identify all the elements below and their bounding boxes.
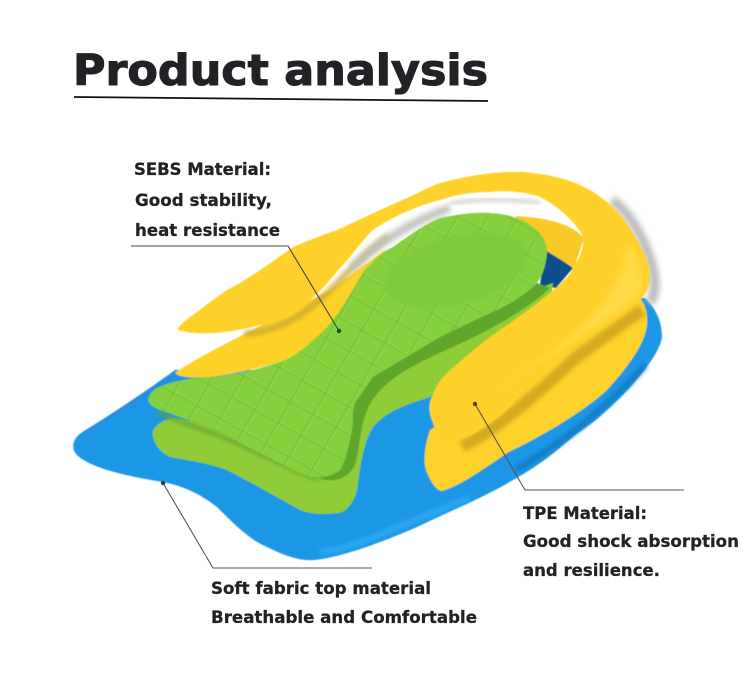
title: Product analysis — [73, 46, 488, 96]
dark green step — [318, 283, 550, 480]
callout: soft fabric: Breathable and Comfortable — [211, 608, 477, 627]
callout: SEBS material: SEBS Material: — [134, 160, 271, 179]
callout: SEBS material — [131, 160, 341, 333]
callout: soft fabric — [161, 481, 477, 627]
heel cup — [378, 221, 534, 319]
callout: TPE material — [473, 402, 739, 580]
dark gap behind heel — [540, 248, 573, 288]
upper yellow U piece — [178, 172, 650, 443]
shadow along U inner edge — [244, 236, 388, 334]
insole illustration — [73, 172, 662, 560]
lower yellow TPE layer — [425, 298, 647, 491]
callout: TPE material: TPE Material: — [523, 504, 647, 523]
callout: SEBS material: Good stability, — [135, 191, 272, 210]
callout: TPE material: Good shock absorption — [523, 532, 739, 551]
shadow under upper yellow — [462, 310, 642, 446]
lower green layer — [153, 283, 553, 514]
blue base layer — [73, 298, 662, 560]
callout: soft fabric: Soft fabric top material — [211, 579, 431, 598]
yellow highlight — [490, 240, 642, 395]
upper green textured layer — [148, 213, 547, 477]
rear yellow layer — [175, 250, 390, 378]
callout: TPE material: and resilience. — [523, 561, 660, 580]
callout: SEBS material: heat resistance — [135, 221, 280, 240]
